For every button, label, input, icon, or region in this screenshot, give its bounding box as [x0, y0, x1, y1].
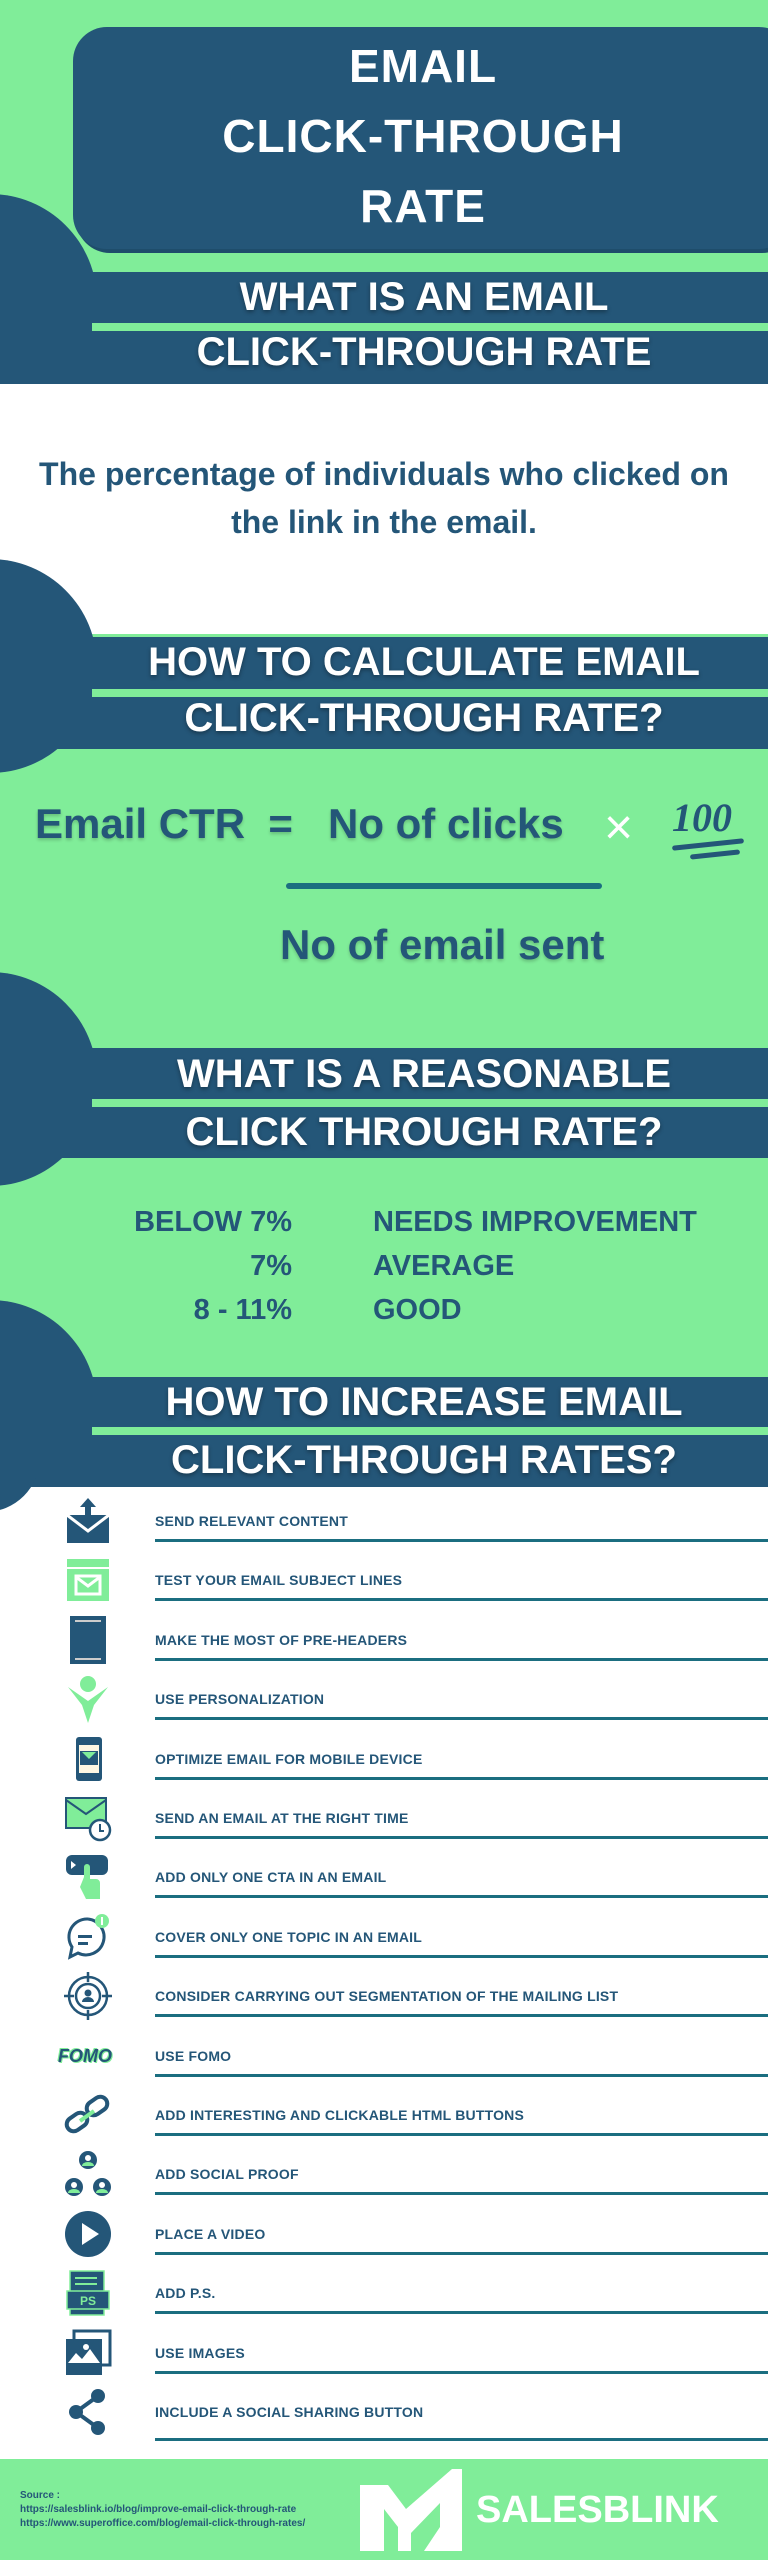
heading band: what is: WHAT IS AN EMAIL	[240, 275, 608, 319]
tip 3: MAKE THE MOST OF PRE-HEADERS	[155, 1632, 407, 1648]
icon: fomo text: FOMO	[58, 2046, 112, 2066]
icon: people	[65, 2151, 111, 2196]
tip 2	[67, 1559, 768, 1601]
tip 9: CONSIDER CARRYING OUT SEGMENTATION OF THE MAILING LIST	[155, 1988, 618, 2004]
formula: No of clicks	[328, 800, 564, 847]
definition text	[39, 456, 729, 540]
tip 12: ADD SOCIAL PROOF	[155, 2166, 299, 2182]
icon: email clock	[65, 1797, 112, 1842]
rates table: BELOW 7%	[134, 1206, 292, 1238]
heading band: reasonable	[0, 1048, 768, 1158]
formula: No of email sent	[280, 921, 604, 968]
icon: target person	[64, 1972, 112, 2020]
tip 1	[67, 1498, 768, 1543]
tip 11	[64, 2094, 768, 2136]
rates table	[134, 1206, 697, 1326]
formula: 100	[672, 795, 732, 840]
tip 15	[66, 2330, 768, 2375]
circle decoration 2	[0, 559, 97, 773]
title box: CLICK-THROUGH	[222, 110, 624, 162]
heading band: reasonable: WHAT IS A REASONABLE	[177, 1052, 671, 1096]
circle decoration 1	[0, 194, 97, 408]
rates table: NEEDS IMPROVEMENT	[373, 1206, 697, 1238]
formula: Email CTR =	[35, 800, 293, 847]
source text	[20, 2490, 306, 2529]
tip 4	[68, 1676, 768, 1723]
tip 6: SEND AN EMAIL AT THE RIGHT TIME	[155, 1810, 409, 1826]
tip 16: INCLUDE A SOCIAL SHARING BUTTON	[155, 2404, 423, 2420]
icon: link	[64, 2094, 110, 2134]
formula	[35, 795, 744, 968]
icon: tablet	[70, 1616, 106, 1664]
rates table: GOOD	[373, 1294, 462, 1326]
icon: mobile	[76, 1737, 102, 1781]
icon: inbox upload	[67, 1498, 109, 1543]
icon: play	[65, 2211, 111, 2257]
heading band: calculate: CLICK-THROUGH RATE?	[184, 696, 664, 740]
footer	[0, 2459, 768, 2560]
tip 15: USE IMAGES	[155, 2345, 245, 2361]
tip 5	[76, 1737, 768, 1781]
icon: person	[68, 1676, 108, 1723]
white definition panel	[0, 384, 768, 634]
tip 5: OPTIMIZE EMAIL FOR MOBILE DEVICE	[155, 1751, 422, 1767]
tip 8: COVER ONLY ONE TOPIC IN AN EMAIL	[155, 1929, 422, 1945]
tip 3	[70, 1616, 768, 1664]
rates table: 7%	[250, 1250, 292, 1282]
circle decoration 4	[0, 1300, 97, 1514]
tip 2: TEST YOUR EMAIL SUBJECT LINES	[155, 1572, 402, 1588]
tip 14	[66, 2270, 768, 2316]
tip 10: USE FOMO	[155, 2048, 231, 2064]
tip 10	[57, 2046, 768, 2077]
rates table: AVERAGE	[373, 1250, 514, 1282]
definition text: The percentage of individuals who clicked on	[39, 456, 729, 492]
tip 16	[69, 2389, 768, 2441]
tip 11: ADD INTERESTING AND CLICKABLE HTML BUTTONS	[155, 2107, 524, 2123]
tip 4: USE PERSONALIZATION	[155, 1691, 324, 1707]
title box: RATE	[360, 180, 486, 232]
tip 13: PLACE A VIDEO	[155, 2226, 265, 2242]
tip 9	[64, 1972, 768, 2020]
heading band: increase	[0, 1377, 768, 1487]
source text: https://www.superoffice.com/blog/email-click-through-rates/	[20, 2518, 305, 2529]
logo text: SALESBLINK	[476, 2489, 719, 2531]
heading band: what is: CLICK-THROUGH RATE	[197, 330, 651, 374]
icon: ps file	[66, 2270, 110, 2316]
icon: images	[66, 2330, 112, 2375]
icon: share	[69, 2389, 105, 2435]
source text: Source :	[20, 2490, 60, 2501]
logo mark	[360, 2469, 462, 2551]
tip 12	[65, 2151, 768, 2196]
rates table: 8 - 11%	[194, 1294, 292, 1326]
heading band: calculate	[0, 637, 768, 749]
heading band: calculate: HOW TO CALCULATE EMAIL	[148, 640, 700, 684]
heading band: increase: CLICK-THROUGH RATES?	[171, 1438, 677, 1482]
tip 14: ADD P.S.	[155, 2285, 215, 2301]
icon: ps file: PS	[80, 2294, 96, 2308]
heading band: increase: HOW TO INCREASE EMAIL	[165, 1380, 683, 1424]
tip 7: ADD ONLY ONE CTA IN AN EMAIL	[155, 1869, 386, 1885]
white tips panel	[0, 1487, 768, 2459]
icon: click button	[66, 1855, 108, 1899]
tip 8	[67, 1914, 768, 1960]
tip 13	[65, 2211, 768, 2257]
icon: chat bubble	[67, 1914, 109, 1960]
circle decoration 3	[0, 972, 97, 1186]
heading band: reasonable: CLICK THROUGH RATE?	[186, 1110, 662, 1154]
definition text: the link in the email.	[231, 504, 537, 540]
source text: https://salesblink.io/blog/improve-email-click-through-rate	[20, 2504, 296, 2515]
formula: ×	[604, 799, 633, 855]
tip 1: SEND RELEVANT CONTENT	[155, 1513, 348, 1529]
tip 7	[66, 1855, 768, 1899]
title box	[73, 27, 768, 249]
icon: email window	[67, 1559, 109, 1601]
heading band: what is	[0, 272, 768, 384]
title box: EMAIL	[349, 40, 497, 92]
tip 6	[65, 1797, 768, 1842]
